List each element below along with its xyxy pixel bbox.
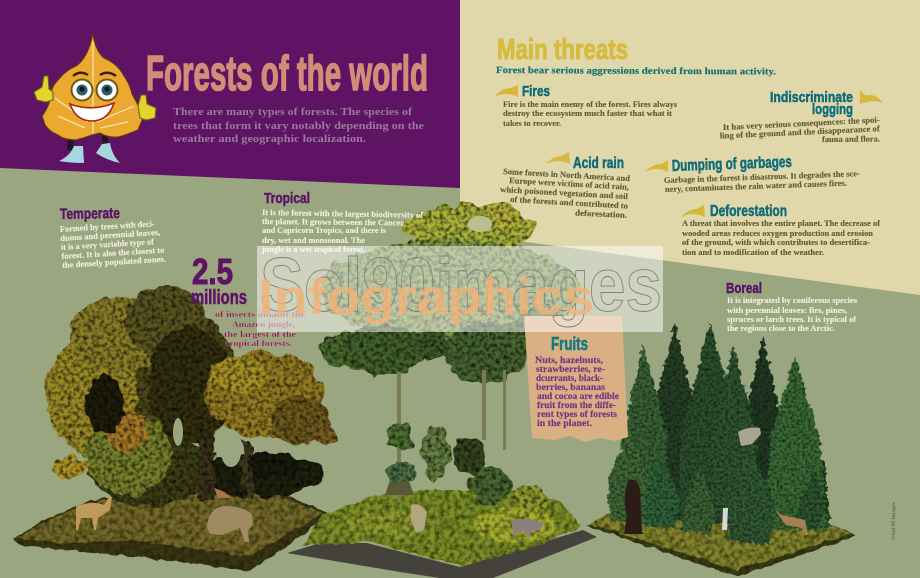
text: deforestation: wooded areas reduces oxygen production and erosion [682,229,873,238]
text: insects: Amazon jungle, [232,319,295,329]
soil: tropical [287,530,597,578]
icon: arrow dumping [645,160,668,172]
icon: leaf mascot [34,33,156,163]
heading: fires: Fires [522,83,550,100]
illustration: boreal forest diorama [588,322,856,577]
panel: dumping of garbages [645,154,860,194]
icon: arrow fires [494,85,518,97]
copyright note: ©Sol 90 Images [891,502,897,540]
panel: acid rain [500,152,631,220]
watermark: Sol90images: Sol90images [260,243,662,328]
animal: standing bear [624,480,644,534]
intro text block [173,107,424,145]
text: fruits: dcurrants, black- [536,373,603,384]
ground: boreal [588,497,856,577]
label: millions: millions [191,287,247,309]
text: temperate: Formed by trees with deci- [60,219,155,234]
number: 2.5: 2.5 [192,251,233,292]
text: tropical: dry, wet and monsoonal. The [262,236,365,245]
heading: indiscriminate logging [770,89,853,118]
text: fires: takes to recover. [503,119,561,128]
panel: fires [494,83,678,128]
heading: main threats: Main threats [497,34,628,66]
intro text block: There are many types of forests. The species of [173,107,413,118]
heading: boreal: Boreal [726,280,762,297]
heading: indiscriminate logging: Indiscriminate [770,89,853,106]
text: acid rain: deforestation. [575,209,627,220]
text: tropical [261,208,423,254]
text: dumping: Garbage in the forest is disastrous. It degrades the sce- [664,169,860,185]
text: boreal: It is integrated by coniferous species [727,296,858,305]
watermark: Infographics: Infographics [258,269,594,325]
panel: beige threats background [460,0,920,295]
text: boreal: the regions close to the Arctic. [727,324,835,333]
text: insects: tropical forests. [226,338,292,348]
text block: boreal [726,280,858,333]
conifers front row [608,430,826,545]
text: fires [503,100,678,128]
panel: deforestation [681,203,880,257]
animal: small fox [214,488,231,498]
text: boreal [727,296,858,333]
text: insects: the largest of the [224,329,296,339]
trees: temperate [46,286,341,506]
ground moss: tropical [302,490,582,566]
animal: deer [76,497,112,530]
text: deforestation: of the ground, with which contributes to desertifica- [682,238,870,247]
text: temperate: forest. It is also the closest to [61,246,165,261]
text: temperate: it is a very variable type of [61,237,154,252]
text: acid rain: Some forests in North America and [503,167,631,183]
animal: wolf [722,508,728,530]
text: tropical: It is the forest with the largest biodiversity of [262,208,423,220]
callout: 2.5 millions [191,251,305,348]
text: dumping [664,169,860,194]
text: logging [720,115,880,144]
heading: indiscriminate logging: logging [812,101,853,118]
text block: temperate [60,205,166,270]
text: tropical: and Capricorn Tropics, and there is [262,226,387,235]
panel: purple title background [0,0,460,188]
heading: tropical: Tropical [264,190,310,207]
watermark [257,243,663,332]
text: deforestation [682,219,880,257]
upper canopy: tropical [318,203,582,382]
text: temperate: the densely populated zones. [62,255,166,270]
text: fruits: rent types of forests [537,409,617,420]
trunks: tropical [385,370,506,502]
text: acid rain [500,167,631,220]
text: logging: It has very serious consequences: the spoi- [723,115,880,132]
subheading: main threats: Forest bear serious aggressions derived from human activity. [496,65,776,77]
text: deforestation: A threat that involves the entire planet. The decrease of [682,219,880,228]
animal: brown bear [207,506,253,542]
text: boreal: spruces or larch trees. It is typical of [727,315,856,324]
text: fruits: Nuts, hazelnuts, [535,355,604,366]
text: fruits: fruit from the diffe- [537,400,616,411]
ground: temperate [13,480,330,571]
icon: arrow acid rain [546,152,570,164]
text: insects [215,309,305,348]
title: Forests of the world [146,47,428,101]
icon: arrow deforestation [681,205,705,217]
panel: fruits note [524,316,628,442]
intro text block: weather and geographic localization. [173,134,366,145]
text: fruits: strawberries, re- [536,364,605,375]
sky gap in canopy [468,216,492,232]
text: temperate: duous and perennial leaves, [60,228,160,243]
panel: indiscriminate logging [720,89,883,144]
text: tropical: the planet. It grows between the Cancer [262,217,404,227]
text: fires: destroy the ecosystem much faster that what it [503,109,672,118]
text: insects: of insects inhabit the [215,309,305,319]
heading: fruits: Fruits [551,334,588,354]
text: logging: fauna and flora. [822,134,880,144]
text: boreal: with perennial leaves: firs, pines, [727,306,847,315]
animal: tapir [511,519,544,537]
sky gaps between temperate trunks [173,418,183,446]
text: fruits [535,355,620,429]
text block: tropical [261,190,423,254]
text: acid rain: which poisoned vegetation and soil [500,185,629,201]
illustration: temperate forest diorama [13,286,341,571]
animal: lynx [738,428,761,446]
text: logging: ling of the ground and the disappearance of [720,124,880,140]
animal: jaguar [411,504,427,533]
heading: acid rain: Acid rain [573,155,624,172]
watermark band [257,246,663,332]
text: fruits: and cocoa are edible [537,391,620,402]
text: acid rain: Europe were victims of acid rain, [509,176,629,192]
paper background [524,316,628,442]
text: dumping: nery, contaminates the rain water and causes fires. [665,179,847,194]
animal: deer boreal [775,510,808,535]
heading: dumping: Dumping of garbages [672,154,792,175]
icon: arrow logging [860,90,883,104]
text: tropical: jungle is a wet tropical forest. [261,245,365,254]
mid trees: tropical [385,422,550,510]
text: deforestation: tion and to modification of the weather. [682,248,824,257]
text: fires: Fire is the main enemy of the forest. Fires always [503,100,678,109]
heading: temperate: Temperate [60,205,120,223]
intro text block: trees that form it vary notably depending on the [173,121,424,132]
text: fruits: berries, bananas [536,382,605,393]
text: temperate [60,219,166,270]
conifers back row [610,322,830,530]
text: fruits: in the planet. [537,418,592,429]
text: acid rain: of the forests and contributed to [510,195,628,211]
heading: deforestation: Deforestation [710,203,787,220]
illustration: tropical forest diorama [287,203,597,578]
